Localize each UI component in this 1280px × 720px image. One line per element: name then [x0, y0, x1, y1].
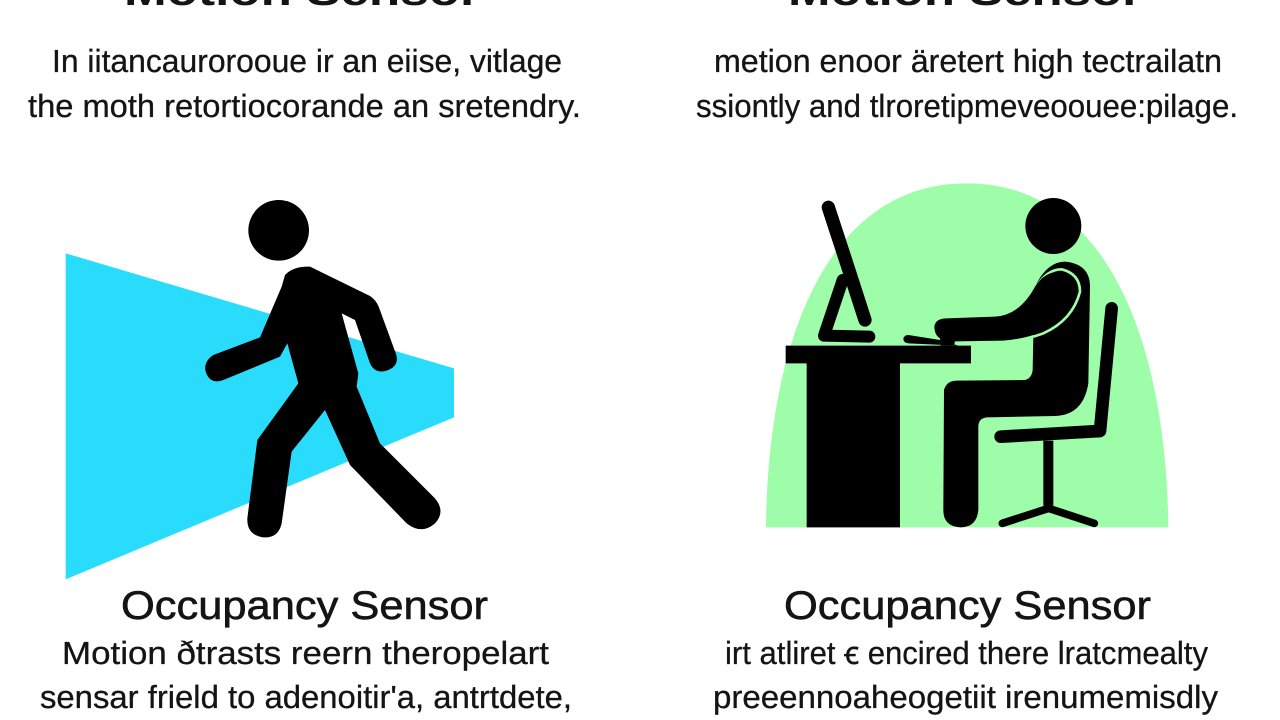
seated person head	[1025, 198, 1081, 254]
panel: right column	[696, 0, 1238, 715]
panel: left column	[28, 0, 581, 715]
seated person body	[943, 262, 1090, 527]
seated person arm	[934, 272, 1077, 346]
text block: top left description: In iitancauroroouе ir an eiise, vitlage	[52, 43, 562, 79]
heading: right occupancy sensor: Occupancy Sensor	[784, 584, 1151, 628]
walking person body	[205, 267, 440, 537]
text block: bottom left description: Motion ðtrasts reern theropelart	[62, 635, 549, 671]
office chair	[1001, 308, 1112, 523]
text block: top left description: the moth retortiocorande an sretendry.	[28, 88, 581, 124]
text block: bottom left description	[40, 635, 572, 715]
desk	[786, 346, 971, 527]
text block: top right description	[696, 43, 1238, 124]
text block: top right description: metion enoor äretert high tectrailatn	[714, 43, 1222, 79]
computer monitor	[824, 207, 869, 337]
text block: bottom right description: irt atliret ꞓ encired there lratcmealty	[725, 635, 1208, 671]
sensor beam	[66, 253, 454, 579]
keyboard	[903, 335, 958, 346]
text block: top left description	[28, 43, 581, 124]
walking person head	[248, 200, 309, 261]
icon: walking person in motion sensor beam	[66, 200, 454, 579]
heading: left occupancy sensor: Occupancy Sensor	[121, 584, 488, 628]
text block: top right description: ssiontly and tlroretipmeveoouee:pilage.	[696, 88, 1238, 124]
text block: bottom right description	[713, 635, 1218, 715]
text block: bottom right description: preeennoaheogetiit irenumemisdly	[713, 679, 1218, 715]
icon: person seated at desk with computer	[766, 183, 1168, 527]
seated person arm outline	[1013, 269, 1080, 341]
green detection dome	[766, 183, 1168, 527]
text block: bottom left description: sensar frield to adenoitir'a, antrtdete,	[40, 679, 572, 715]
